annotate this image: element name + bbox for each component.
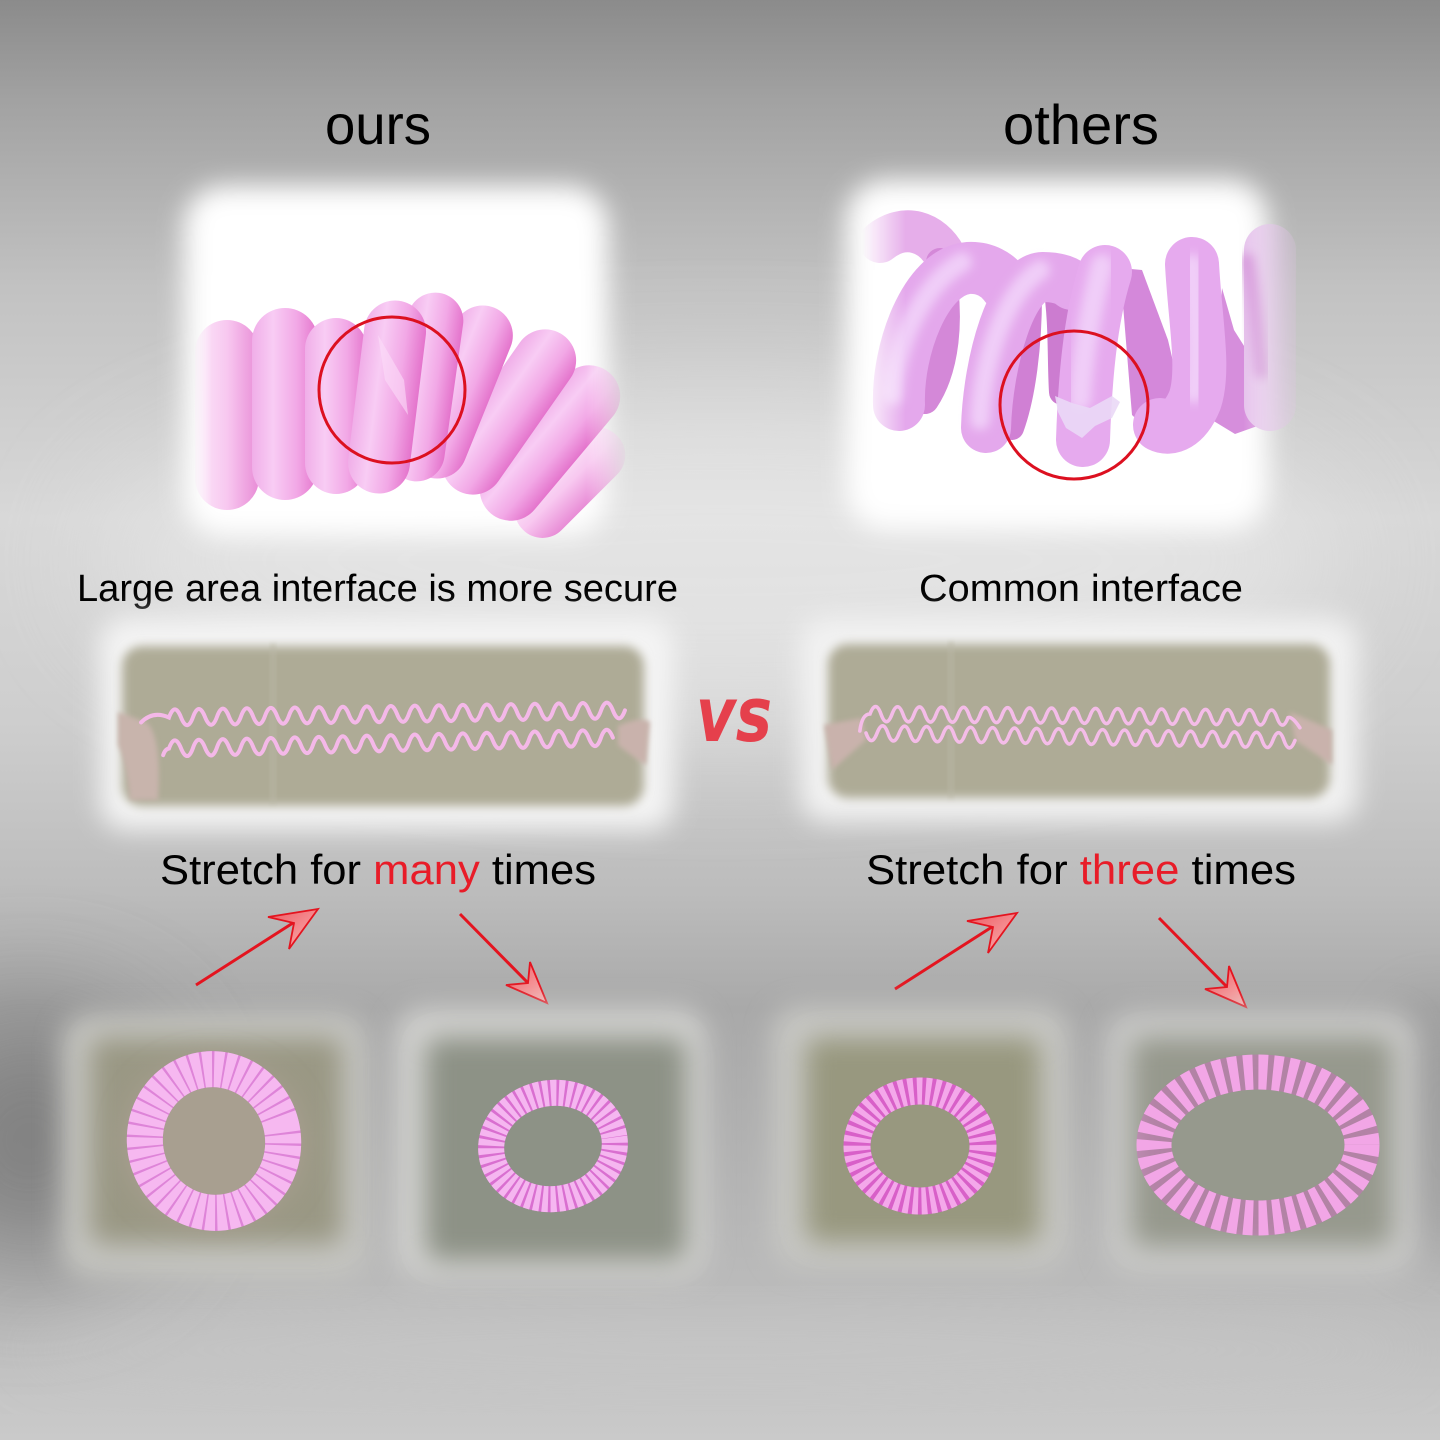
red circle highlight [1000,331,1148,479]
coil loops [195,289,636,549]
stretched coil waves [141,702,625,757]
caption: stretch for many times: Stretch for many times [160,846,596,893]
panel: others ring after stretching [1106,1012,1416,1274]
coil tube [880,231,1270,445]
pink coil ring [1154,1072,1362,1218]
panel: others ring before stretching [772,1006,1068,1268]
arrow: others down-right [1159,918,1246,1007]
panel: ours close-up photo of coil interface [184,186,636,549]
pink coil ring [130,1054,298,1228]
arrow: others up-right [895,913,1017,989]
panel: ours ring after stretching [396,1008,706,1278]
glue seam [1055,396,1120,438]
arrow: ours down-right [460,914,547,1003]
pink coil ring [857,1091,983,1201]
panel: others stretched coil photo [800,618,1358,822]
caption: others interface: Common interface [919,568,1243,610]
heading: ours: ours [325,93,431,156]
fingers [824,718,866,770]
arrow: ours up-right [196,909,318,985]
caption: ours interface: Large area interface is more secure [77,568,678,610]
caption: stretch for three times: Stretch for three times [866,846,1296,893]
vs label: vs [696,670,772,759]
panel: ours stretched coil photo [100,618,674,830]
pink coil ring [484,1085,622,1207]
panel: others close-up photo of coil interface [846,180,1270,530]
stretched coil waves [860,706,1300,748]
heading: others: others [1003,93,1159,156]
red circle highlight [319,317,465,463]
fingers [118,712,159,800]
panel: ours ring before stretching [62,1014,366,1278]
